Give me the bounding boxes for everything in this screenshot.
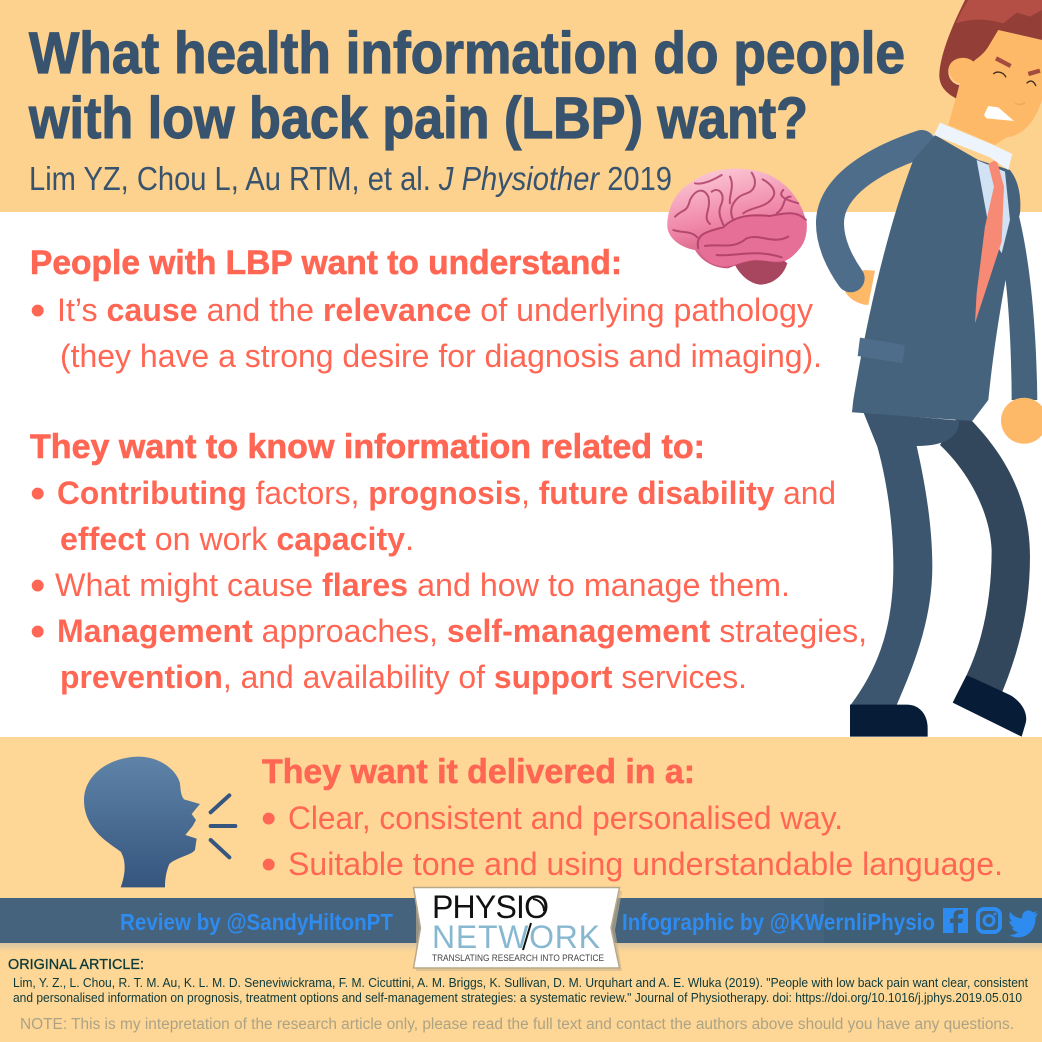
text block: understanding (30, 244, 822, 374)
panel: header band (0, 0, 1042, 212)
front hand (1001, 398, 1042, 444)
text block: information wanted: Contributing factors, prognosis, future disability and (57, 475, 836, 511)
icon: brain (667, 169, 807, 285)
icon: instagram (978, 909, 1000, 932)
tie (975, 159, 1004, 323)
title: with low back pain (LBP) want? (28, 86, 808, 151)
text block: understanding: • (30, 286, 45, 335)
text block: delivery: Suitable tone and using understandable language. (288, 846, 1003, 882)
logo: Physio Network: TRANSLATING RESEARCH INTO PRACTICE (432, 953, 604, 964)
text block: information wanted: • (30, 607, 45, 656)
citation text (13, 976, 1029, 1005)
original article label: ORIGINAL ARTICLE: (8, 956, 144, 973)
footer bar (0, 898, 1042, 952)
icon: twitter (1009, 910, 1038, 937)
torso, head and clothing (852, 0, 1042, 421)
text block: information wanted: What might cause flares and how to manage them. (55, 567, 790, 603)
panel: delivery band (0, 737, 1042, 898)
text block: information wanted: prevention, and availability of support services. (60, 659, 747, 695)
text block: information wanted: effect on work capacity. (60, 521, 414, 557)
text block: information wanted: • (30, 469, 45, 518)
jacket (852, 135, 1020, 421)
pocket (858, 338, 905, 363)
text block: delivery: Clear, consistent and personalised way. (288, 800, 843, 836)
right sleeve (1003, 213, 1037, 400)
citation text: Lim, Y. Z., L. Chou, R. T. M. Au, K. L. M. D. Seneviwickrama, F. M. Cicuttini, A. M. Briggs, K. Sullivan, D. M. Urquhart and A. E. Wluka (2019). "People with low back pain want clear, consistent (13, 976, 1029, 990)
icon: facebook (943, 908, 968, 933)
note: NOTE: This is my intepretation of the research article only, please read the full text and contact the authors above should you have any questions. (20, 1016, 1014, 1033)
text block: understanding: People with LBP want to understand: (30, 244, 622, 282)
logo: Physio Network: PHYSIO (432, 889, 549, 925)
logo: Physio Network: NETWORK (432, 919, 600, 955)
face details (996, 58, 1040, 74)
text block: information wanted: Management approaches, self-management strategies, (57, 613, 867, 649)
collar (934, 123, 1012, 170)
credit: review by: Review by @SandyHiltonPT (120, 909, 393, 935)
text block: information wanted (30, 428, 867, 695)
text block: delivery: • (261, 794, 276, 843)
logo: Physio Network (414, 888, 622, 971)
text block: information wanted: They want to know information related to: (30, 428, 705, 466)
panel: footer background (0, 898, 1042, 1042)
illustration: man with back pain (830, 0, 1042, 737)
hair (939, 0, 1042, 98)
text block: understanding: (they have a strong desire for diagnosis and imaging). (60, 338, 822, 374)
panel: main white area (0, 212, 1042, 737)
title: What health information do people (29, 21, 905, 86)
neck and face (948, 30, 1042, 145)
text block: understanding: It’s cause and the relevance of underlying pathology (57, 292, 813, 328)
citation subtitle: Lim YZ, Chou L, Au RTM, et al. J Physiother 2019 (29, 160, 672, 197)
title (28, 21, 905, 151)
legs and shoes (850, 412, 1030, 737)
citation text: and personalised information on prognosis, treatment options and self-management strategies: a systematic review." Journal of Physiotherapy. doi: https://doi.org/10.1016/j.jphys.2019.05.010 (13, 991, 1022, 1005)
icon: speaking head (84, 757, 235, 887)
shirt (977, 160, 1010, 253)
credit: infographic by: Infographic by @KWernliPhysio (622, 909, 935, 935)
text block: delivery: They want it delivered in a: (262, 753, 695, 791)
text block: information wanted: • (30, 561, 45, 610)
back arm and hand (830, 144, 922, 305)
text block: delivery: • (261, 840, 276, 889)
text block: delivery (261, 753, 1003, 889)
